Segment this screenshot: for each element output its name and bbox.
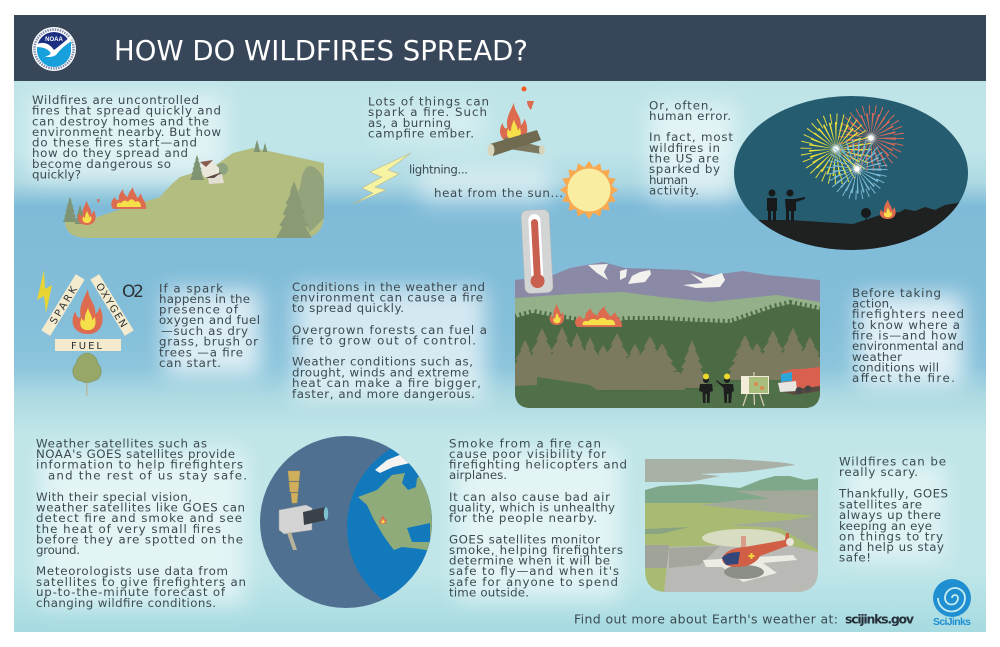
text: human error: the US are [649,152,719,166]
text: spark: happens in the [159,292,250,306]
text: intro: quickly? [32,168,81,182]
text: smoke: determine when it will be [449,554,610,568]
text: lightning: lightning... [409,162,468,176]
text: smoke: cause poor visibility for [449,447,606,461]
text: intro: do these fires start—and [32,136,197,150]
text: satellites: changing wildfire conditions. [36,596,216,610]
text: sparks: as, a burning [368,116,451,130]
text: sparks: spark a fire. Such [368,105,487,119]
text: conditions: heat can make a fire bigger, [292,376,481,390]
text: satellites: before they are spotted on the [36,532,243,546]
text: smoke: GOES satellites monitor [449,532,600,546]
text: smoke: It can also cause bad air [449,490,610,504]
pine trees [505,327,830,390]
text: scary: always up there [839,508,941,522]
text: spark: presence of [159,302,239,316]
text: conditions: fire to grow out of control. [292,334,476,348]
text: scary: keeping an eye [839,519,932,533]
text: before action: firefighters need [852,307,964,321]
title: HOW DO WILDFIRES SPREAD? [114,35,528,67]
text: sparks [368,94,489,140]
text: scary: Wildfires can be [839,455,946,469]
text: before action: weather [852,350,902,364]
text: satellites: ground. [36,543,80,557]
text: satellites: NOAA's GOES satellites provide [36,447,235,461]
text: intro: become dangerous so [32,157,171,171]
map board [741,372,769,406]
text: human error: human [649,173,688,187]
text: satellites: up-to-the-minute forecast of [36,585,226,599]
text: satellites: Meteorologists use data from [36,564,228,578]
mountains [515,262,820,302]
icon: NOAA logo: NOAA [45,37,63,43]
text: conditions: to spread quickly. [292,301,404,315]
text: smoke: Smoke from a fire can [449,437,601,451]
text: spark: grass, brush or [159,334,258,348]
text: human error: activity. [649,184,699,198]
diagram: fire triangle [37,270,144,396]
text: satellites: weather satellites like GOES can [36,500,245,514]
text: conditions: faster, and more dangerous. [292,387,475,401]
text: conditions: Weather conditions such as, [292,354,473,368]
fires [550,303,564,325]
text: conditions: drought, winds and extreme [292,366,469,380]
text: sparks: Lots of things can [368,94,489,108]
text: satellites: detect fire and smoke and see [36,511,242,525]
text: scary: Thankfully, GOES [838,487,948,501]
footer text: scijinks.gov [845,612,914,626]
two people [767,190,805,221]
text: human error: wildfires in [649,141,720,155]
text: satellites: Weather satellites such as [36,436,207,450]
blue burst [831,143,883,195]
text: human error: Or, often, [649,98,713,112]
text: satellites: information to help firefighters [36,458,243,472]
text: smoke: safe for anyone to spend [449,575,618,589]
text: spark: —such as dry [161,324,248,338]
text: before action: environmental and [852,339,964,353]
house [200,160,228,184]
text: before action: fire is—and how [852,328,957,342]
fuel strip: FUEL [71,341,102,352]
text: scary [838,455,948,564]
icon: sun [560,161,618,219]
text: intro [32,93,221,182]
text: before action: conditions will [852,360,939,374]
text: before action: action, [852,296,893,310]
satellite [279,471,328,550]
text: spark [159,282,260,370]
illustration: satellite and earth [260,436,432,608]
dark ground [758,202,960,250]
text: satellites: With their special vision, [36,490,192,504]
illustration: hillside with fire and house [63,140,324,238]
icon: NOAA logo [32,27,76,71]
text: human error: In fact, most [649,130,733,144]
icon: campfire [488,86,545,156]
icon: SciJinks logo: SciJinks [933,616,971,628]
text: smoke: firefighting helicopters and [449,458,627,472]
o2 label: O2 [122,282,144,302]
text: satellites: the heat of very small fires [36,522,221,536]
text: satellites: satellites to give firefighters an [36,575,246,589]
text: intro: Wildfires are uncontrolled [32,93,199,107]
text: smoke: safe to fly—and when it's [449,564,619,578]
text: human error [649,98,733,198]
firefighters [699,374,734,403]
text: scary: really scary. [839,465,918,479]
text: human error: human error. [649,109,731,123]
text: smoke: smoke, helping firefighters [449,543,623,557]
tree [73,353,101,396]
text: smoke: airplanes. [449,468,507,482]
illustration: helicopter on helipad [645,459,818,592]
text: intro: environment nearby. But how [32,125,221,139]
footer text: Find out more about Earth's weather at: [574,612,838,626]
text: before action: Before taking [852,286,941,300]
text glow areas [30,95,963,605]
text: scary: safe! [839,550,871,564]
text: before action [852,286,964,385]
text: satellites [36,436,247,610]
oxygen strip: OXYGEN [93,281,129,330]
text: smoke: time outside. [449,586,529,600]
text: spark: can start. [159,356,221,370]
text: intro: can destroy homes and the [32,114,209,128]
text: satellites: and the rest of us stay safe. [48,468,247,482]
text: conditions: Conditions in the weather and [292,280,485,294]
yellow burst [806,119,866,179]
text: smoke [449,437,627,600]
text: intro: fires that spread quickly and [32,104,221,118]
icon: SciJinks logo [933,579,971,628]
header bar [14,15,986,81]
illustration: forest fire scene [505,262,830,408]
illustration: fireworks [734,96,968,250]
fire truck [778,367,820,395]
text: smoke: for the people nearby. [449,511,597,525]
text: scary: on things to try [839,530,943,544]
icon: thermometer [521,209,553,294]
text: spark: oxygen and fuel [159,313,260,327]
text: spark: trees —a fire [159,346,243,360]
text: heat: heat from the sun... [434,186,563,200]
text: before action: to know where a [852,318,960,332]
text: conditions: environment can cause a fire [292,290,483,304]
text: human error: sparked by [649,162,720,176]
text: scary: and help us stay [839,540,944,554]
text: scary: satellites are [839,498,922,512]
text: sparks: campfire ember. [368,126,474,140]
red burst [843,110,899,166]
icon: bolt [37,270,52,313]
spark strip: SPARK [48,285,80,326]
text: spark: If a spark [159,282,223,296]
text: conditions [292,280,487,401]
text: smoke: quality, which is unhealthy [449,500,615,514]
text: intro: how do they spread and [32,146,188,160]
text: conditions: Overgrown forests can fuel a [292,323,487,337]
icon: lightning [353,153,411,204]
text: before action: affect the fire. [852,371,955,385]
flame [73,289,103,334]
